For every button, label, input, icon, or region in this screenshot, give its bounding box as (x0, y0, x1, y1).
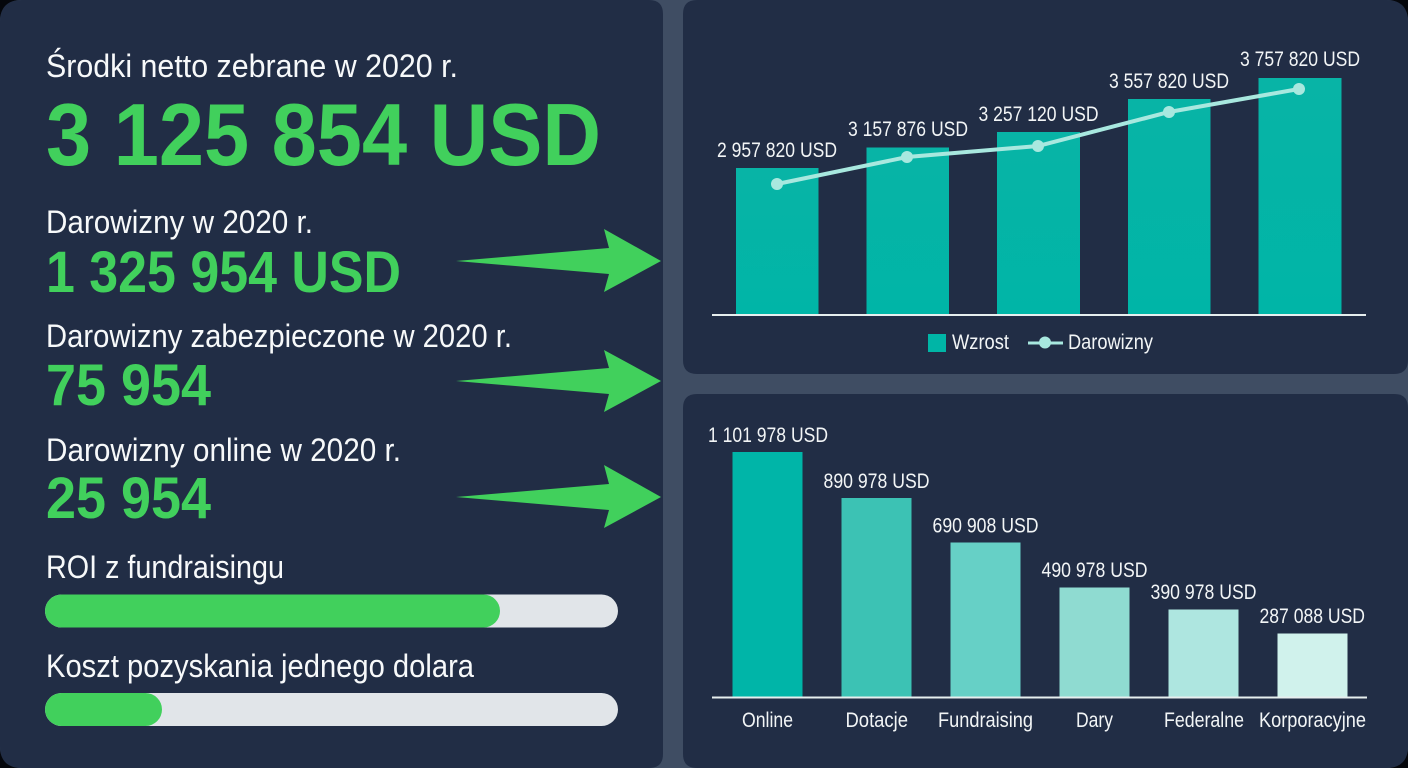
category labels: sources: Dotacje (846, 709, 908, 732)
value labels: sources: 1 101 978 USD (708, 424, 828, 447)
heading: net funds label: Środki netto zebrane w 2020 r. (46, 48, 458, 84)
category labels: sources: Fundraising (938, 709, 1033, 732)
value labels: growth: 3 257 120 USD (978, 103, 1098, 126)
panel: growth chart (683, 0, 1408, 374)
category labels: sources (742, 709, 1366, 732)
panel: donation sources chart (683, 394, 1408, 768)
category labels: sources: Online (742, 709, 793, 732)
axis line (712, 314, 1366, 316)
category labels: sources: Federalne (1164, 709, 1244, 732)
number: online donations: 25 954 (46, 466, 211, 531)
panel: key figures (0, 0, 663, 768)
arrow: donations to growth chart (456, 229, 661, 292)
line series: donations (771, 83, 1305, 190)
value labels: growth (717, 48, 1360, 162)
label: secured donations: Darowizny zabezpieczone w 2020 r. (46, 318, 512, 354)
label: fundraising ROI: ROI z fundraisingu (46, 549, 284, 585)
label: donations: Darowizny w 2020 r. (46, 204, 313, 240)
progress bar: fundraising ROI (45, 594, 618, 628)
legend (928, 331, 1153, 354)
value labels: sources: 890 978 USD (824, 470, 930, 493)
arrow: online donations to source chart (456, 465, 661, 528)
value labels: sources: 490 978 USD (1042, 559, 1148, 582)
number: secured donations: 75 954 (46, 353, 211, 418)
progress bar: cost per dollar (45, 693, 618, 726)
value labels: growth: 3 157 876 USD (848, 118, 968, 141)
value labels: growth: 2 957 820 USD (717, 139, 837, 162)
label: online donations: Darowizny online w 2020 r. (46, 432, 401, 468)
value labels: sources: 390 978 USD (1150, 581, 1256, 604)
label: cost per dollar: Koszt pozyskania jednego dolara (46, 648, 474, 684)
number: donations: 1 325 954 USD (46, 240, 401, 305)
bars: sources (732, 452, 1348, 697)
value labels: sources: 287 088 USD (1260, 605, 1365, 628)
arrow: secured donations to charts (456, 350, 661, 412)
value labels: growth: 3 757 820 USD (1240, 48, 1360, 71)
value labels: sources (708, 424, 1365, 628)
headline number: net funds: 3 125 854 USD (46, 85, 601, 184)
legend: Darowizny (1068, 331, 1153, 354)
value labels: growth: 3 557 820 USD (1109, 70, 1229, 93)
category labels: sources: Dary (1076, 709, 1113, 732)
legend: Wzrost (952, 331, 1009, 354)
bars: growth (736, 78, 1342, 315)
value labels: sources: 690 908 USD (932, 514, 1038, 538)
axis line (712, 696, 1367, 698)
category labels: sources: Korporacyjne (1259, 709, 1366, 732)
